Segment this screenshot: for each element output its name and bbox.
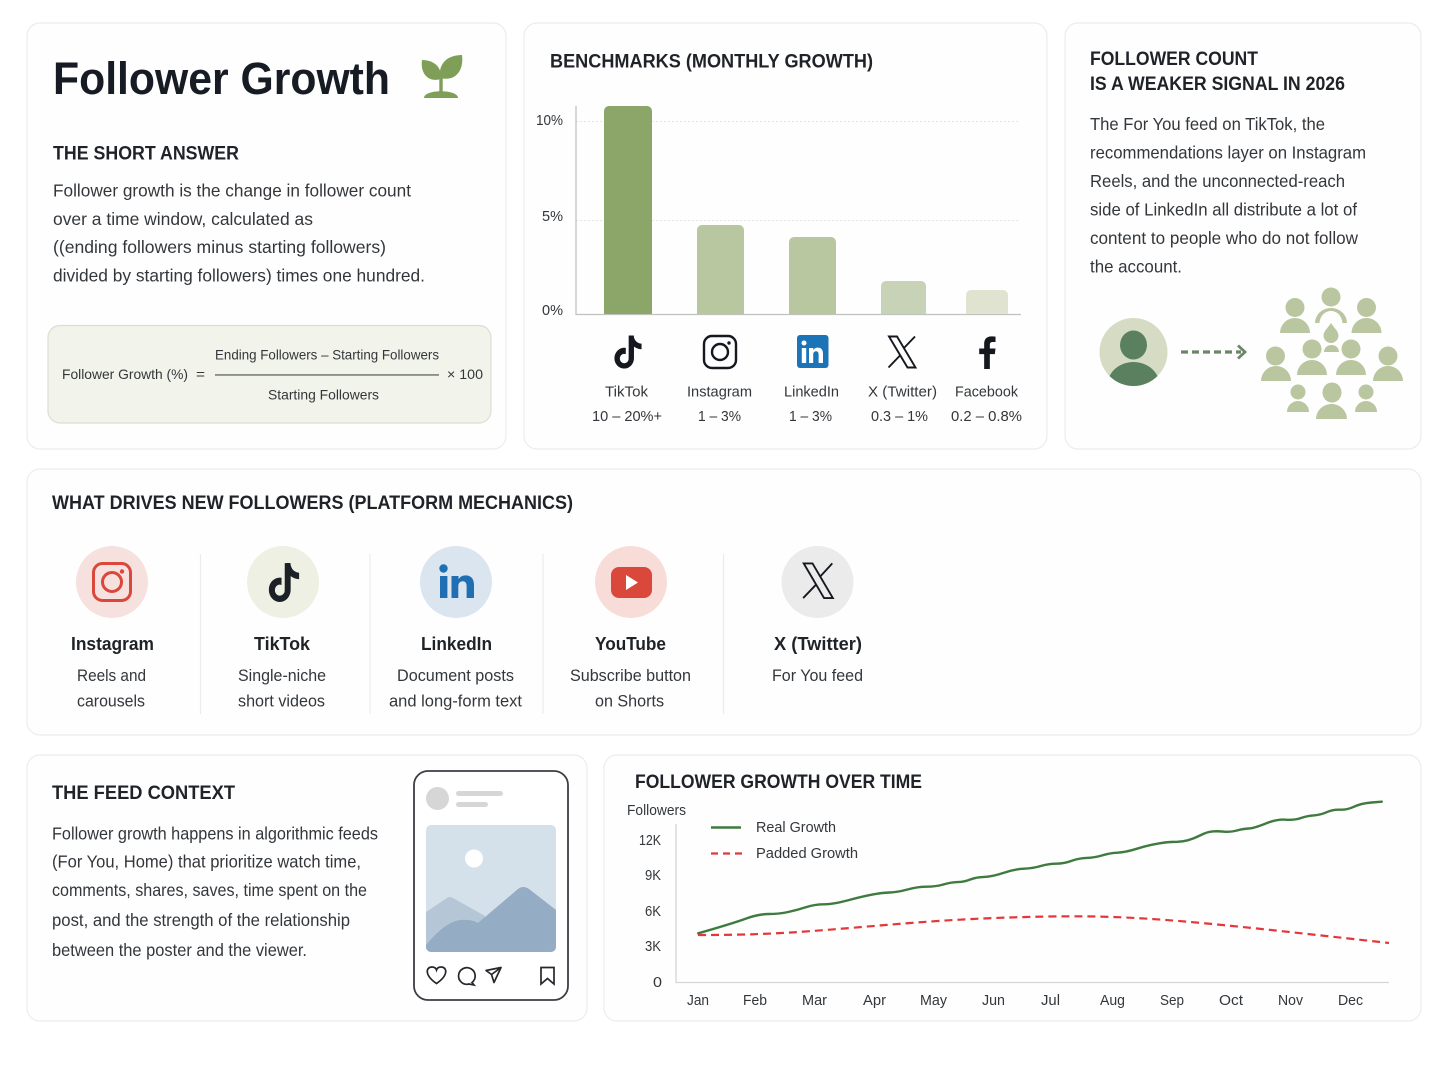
item: tiktok: TikTok (254, 634, 311, 654)
text block: feeds: Follower growth happens in algorithmic feeds (52, 824, 378, 844)
icon: facebook (979, 336, 996, 369)
text block: definition: divided by starting followers) times one hundred. (53, 266, 425, 286)
heading: weaker signal: FOLLOWER COUNT (1090, 49, 1258, 70)
panel: short answer (27, 23, 506, 449)
platform labels: 0.2 – 0.8% (951, 408, 1022, 425)
text block: definition (53, 180, 425, 286)
platform labels: 10 – 20%+ (592, 408, 662, 425)
item: instagram (71, 546, 154, 710)
image placeholder (426, 825, 556, 952)
line chart: Dec (1338, 993, 1363, 1009)
platform labels: TikTok (605, 384, 649, 400)
title: Follower Growth (53, 53, 390, 104)
text block: definition: ((ending followers minus starting followers) (53, 237, 386, 257)
icon: instagram (704, 336, 736, 368)
item: youtube: Subscribe button (570, 667, 691, 685)
line chart: May (920, 993, 948, 1009)
line chart: Nov (1278, 993, 1304, 1009)
platform labels: LinkedIn (784, 384, 839, 400)
item: x (772, 546, 863, 685)
icon: x (888, 336, 916, 368)
heading: the short answer: THE SHORT ANSWER (53, 144, 239, 164)
platform labels (592, 384, 1022, 425)
item: youtube: on Shorts (595, 692, 664, 710)
text block: definition: Follower growth is the change in follower count (53, 180, 411, 200)
text block: distribution (1090, 114, 1366, 276)
formula box: Starting Followers (268, 386, 379, 402)
arrow (1181, 346, 1245, 358)
formula box: Ending Followers – Starting Followers (215, 346, 439, 362)
line chart: 3K (645, 939, 661, 955)
formula box: × 100 (447, 366, 483, 382)
line chart: Aug (1100, 993, 1125, 1009)
panel: benchmarks (524, 23, 1047, 449)
item: tiktok: Single-niche (238, 667, 326, 685)
text block: definition: over a time window, calculated as (53, 209, 313, 229)
text block: feeds: (For You, Home) that prioritize watch time, (52, 852, 361, 872)
icon: heart (427, 967, 446, 984)
icon: single account (1100, 318, 1168, 386)
bar chart: 5% (542, 208, 563, 225)
text block: feeds: comments, shares, saves, time spent on the (52, 880, 367, 900)
line chart: Jan (687, 993, 709, 1009)
line chart: Mar (802, 993, 827, 1009)
icon: bookmark (541, 968, 554, 984)
panel: growth over time (604, 755, 1421, 1021)
formula box (48, 326, 491, 423)
platform labels: 0.3 – 1% (871, 408, 928, 425)
item: instagram: Instagram (71, 634, 154, 654)
bar chart: 0% (542, 302, 563, 319)
text block: distribution: Reels, and the unconnected-reach (1090, 171, 1345, 191)
item: x: For You feed (772, 667, 863, 685)
icon: tiktok (614, 335, 642, 369)
item: tiktok: short videos (238, 692, 325, 710)
line chart: Apr (863, 993, 886, 1009)
item: x: X (Twitter) (774, 634, 862, 654)
item: linkedin: and long-form text (389, 692, 522, 710)
formula box: Follower Growth (%) (62, 366, 188, 382)
icon: comment (459, 968, 475, 985)
bar chart: 10% (536, 112, 563, 129)
icon: send (486, 968, 501, 982)
heading: follower growth over time: FOLLOWER GROWTH OVER TIME (635, 772, 922, 793)
heading: weaker signal (1090, 49, 1345, 95)
text block: feeds: post, and the strength of the relationship (52, 910, 350, 930)
line chart: Feb (743, 993, 767, 1009)
text block: distribution: The For You feed on TikTok, the (1090, 114, 1325, 134)
line chart: 0 (653, 975, 662, 991)
platform labels: Instagram (687, 384, 752, 400)
legend (711, 820, 858, 862)
item: youtube (570, 546, 691, 710)
line chart: Oct (1219, 993, 1243, 1009)
heading: benchmarks: BENCHMARKS (MONTHLY GROWTH) (550, 52, 873, 72)
platform labels: 1 – 3% (698, 408, 741, 425)
text block: distribution: recommendations layer on Instagram (1090, 142, 1366, 162)
text block: distribution: side of LinkedIn all distribute a lot of (1090, 200, 1357, 220)
panel: follower count (1065, 23, 1421, 449)
item: linkedin (389, 546, 522, 710)
item: linkedin: Document posts (397, 667, 514, 685)
heading: weaker signal: IS A WEAKER SIGNAL IN 2026 (1090, 74, 1345, 95)
platform labels: 1 – 3% (789, 408, 832, 425)
platform labels: X (Twitter) (868, 384, 937, 400)
line chart: 6K (645, 904, 661, 920)
icon: sprout (422, 55, 462, 98)
heading: the feed context: THE FEED CONTEXT (52, 783, 235, 804)
item: instagram: carousels (77, 692, 145, 710)
icon: linkedin (797, 335, 828, 368)
platform labels: Facebook (955, 384, 1018, 400)
item: instagram: Reels and (77, 667, 146, 685)
text block: distribution: content to people who do not follow (1090, 228, 1358, 248)
line chart: 9K (645, 868, 661, 884)
legend: Real Growth (756, 820, 836, 836)
text block: feeds (52, 824, 378, 960)
legend: Padded Growth (756, 846, 858, 862)
heading: what drives new followers: WHAT DRIVES NEW FOLLOWERS (PLATFORM MECHANICS) (52, 493, 573, 514)
text block: distribution: the account. (1090, 256, 1182, 276)
phone post mockup (414, 771, 568, 1000)
panel: feed context (27, 755, 587, 1021)
line chart: Jul (1041, 993, 1060, 1009)
panel: platform mechanics (27, 469, 1421, 735)
formula box: = (196, 366, 205, 382)
text block: feeds: between the poster and the viewer. (52, 940, 307, 960)
line: real growth (698, 802, 1382, 933)
item: youtube: YouTube (595, 634, 666, 654)
line chart: Followers (627, 803, 686, 819)
line: padded growth (698, 916, 1389, 943)
bar chart (536, 106, 1021, 319)
item: tiktok (238, 546, 326, 710)
line chart: Sep (1160, 993, 1184, 1009)
line chart (627, 802, 1389, 1009)
line chart: Jun (982, 993, 1005, 1009)
icon: audience crowd (1261, 288, 1403, 419)
item: linkedin: LinkedIn (421, 634, 492, 654)
line chart: 12K (639, 833, 661, 849)
